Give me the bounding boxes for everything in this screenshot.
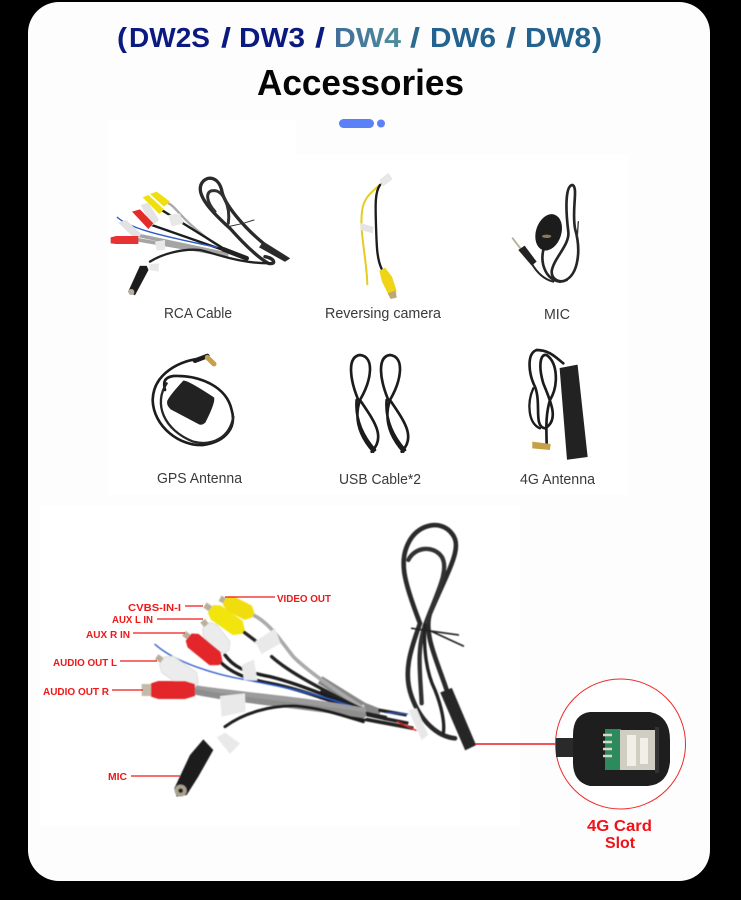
title: model list: / — [506, 22, 516, 53]
label: VIDEO OUT: VIDEO OUT — [277, 593, 332, 605]
label: MIC: MIC — [544, 307, 570, 323]
title: model list: / — [315, 22, 325, 53]
heading accent: pill and dot — [339, 119, 385, 128]
label: 4G Card Slot: Slot — [605, 835, 635, 852]
label: AUX L IN — [112, 614, 203, 626]
plug: VIDEO OUT — [216, 591, 257, 622]
title: model list: DW6 — [430, 22, 496, 53]
panel: USB cables photo — [351, 355, 408, 452]
label: 4G Antenna: 4G Antenna — [520, 472, 596, 488]
module body — [573, 712, 670, 786]
label: RCA Cable: RCA Cable — [164, 306, 232, 322]
panel: labelled RCA cable diagram — [142, 525, 476, 797]
title: model list: DW2S — [129, 22, 210, 53]
plug: AUDIO OUT R — [142, 681, 195, 699]
panel: MIC photo — [513, 185, 578, 282]
title: model list: ) — [592, 22, 602, 53]
label: 4G Card Slot — [587, 818, 652, 852]
callout: 4G card slot zoom — [556, 679, 686, 809]
arrow: module to card slot — [475, 743, 556, 745]
title: model list: / — [410, 22, 420, 53]
cable loop and end module — [404, 525, 476, 750]
SIM slot — [620, 730, 657, 770]
label: AUX R IN: AUX R IN — [86, 629, 130, 641]
label: VIDEO OUT — [225, 593, 332, 605]
panel: RCA cable photo — [111, 178, 290, 295]
panel: 4G antenna photo — [529, 350, 587, 459]
plug: AUDIO OUT L — [151, 648, 203, 693]
callout labels — [43, 593, 332, 783]
title: model list: DW8 — [525, 22, 591, 53]
label: GPS Antenna: GPS Antenna — [157, 471, 243, 487]
wires and plugs — [142, 591, 363, 797]
title: model list: ( — [117, 22, 128, 53]
label: 4G Card Slot: 4G Card — [587, 818, 652, 835]
label: AUDIO OUT R: AUDIO OUT R — [43, 686, 109, 698]
cable tail connector — [320, 680, 428, 740]
module cable — [556, 738, 578, 757]
circuit board — [605, 729, 621, 770]
heading: Accessories: Accessories — [257, 62, 464, 103]
label: USB Cable*2: USB Cable*2 — [339, 472, 421, 488]
USB cable two — [381, 355, 408, 452]
label: MIC callout: MIC — [108, 771, 127, 783]
plug: MIC jack — [174, 739, 213, 797]
plug: AUX R IN — [179, 627, 226, 670]
USB cable one — [351, 355, 378, 452]
cable tags — [217, 628, 281, 754]
plug: CVBS-IN-I — [200, 598, 248, 639]
panel: reversing camera photo — [361, 173, 397, 299]
plug: AUX L IN — [196, 615, 234, 657]
label: AUDIO OUT R — [43, 686, 143, 698]
panel: GPS antenna photo — [153, 356, 233, 445]
label: MIC callout — [108, 771, 180, 783]
title: model list: DW3 — [239, 22, 305, 53]
label: CVBS-IN-I — [128, 602, 203, 614]
title: model list: DW4 — [334, 22, 401, 53]
label: AUDIO OUT L: AUDIO OUT L — [53, 657, 118, 669]
label: AUX L IN: AUX L IN — [112, 614, 153, 626]
title: model list: / — [221, 22, 231, 53]
label: Reversing camera: Reversing camera — [325, 306, 442, 322]
title: model list — [117, 22, 602, 53]
label: AUX R IN — [86, 629, 185, 641]
label: CVBS-IN-I: CVBS-IN-I — [128, 602, 181, 614]
label: AUDIO OUT L — [53, 657, 157, 669]
